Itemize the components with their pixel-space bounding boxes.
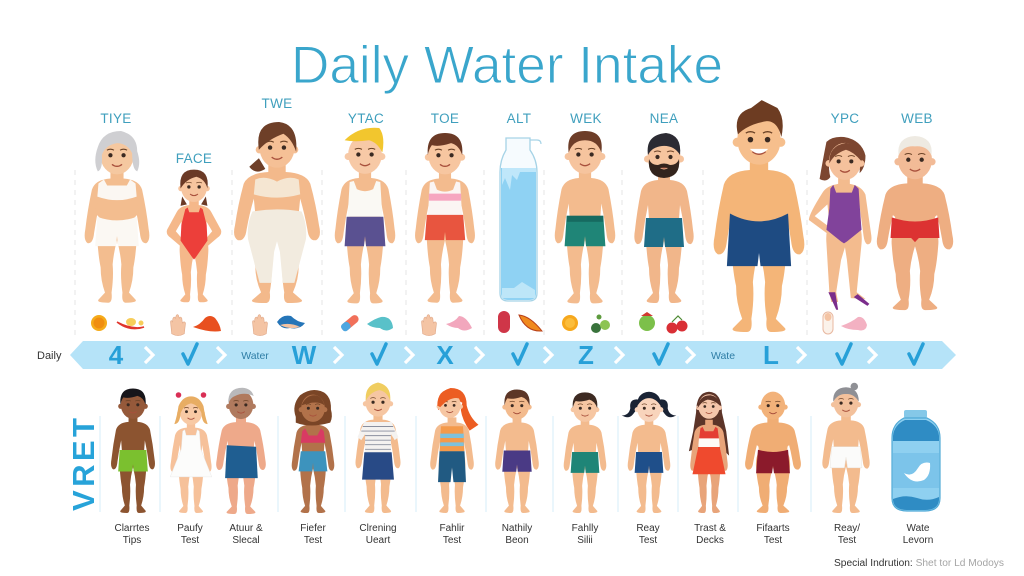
band symbols and words: 4 (109, 340, 124, 370)
band symbols and words: W (292, 340, 317, 370)
top column labels: NEA (650, 111, 678, 126)
top column labels: WEB (901, 111, 933, 126)
top column labels (100, 96, 933, 166)
bottom captions: Ueart (366, 535, 390, 546)
band symbols and words: Z (578, 340, 594, 370)
top column labels: ALT (507, 111, 531, 126)
figure: TOE short-haired girl (415, 133, 475, 303)
top column labels: TOE (431, 111, 459, 126)
band symbols and words: Wate (711, 350, 735, 362)
title: Daily Water Intake (291, 36, 723, 95)
figure: girl with pigtails (622, 392, 676, 513)
figure: WEK boy in teal shorts (555, 131, 615, 303)
figure: tall water bottle (500, 138, 541, 301)
bottom captions: Clarrtes (114, 523, 150, 534)
band symbols and words: X (436, 340, 454, 370)
figure: blonde girl in white dress (170, 392, 212, 513)
figure: grey-haired woman with white shorts (822, 383, 870, 513)
daily label: Daily (37, 350, 62, 362)
bottom captions: Fahlir (439, 523, 465, 534)
figure: boy with teal shorts (564, 392, 606, 513)
figure: FACE girl in red swimsuit (167, 170, 221, 302)
bottom captions: Fiefer (300, 523, 326, 534)
figure: boy with purple shorts (495, 389, 539, 513)
arrow band (70, 341, 956, 369)
figure: bald man with maroon shorts (745, 392, 801, 513)
footnote: Special Indrution: Shet tor Ld Modoys (834, 558, 1004, 569)
bottom captions: Trast & (694, 523, 726, 534)
vertical heading: VRET (66, 418, 101, 511)
band symbols and words (109, 340, 923, 370)
bottom captions: Reay/ (834, 523, 860, 534)
figure: curly-haired woman in pink top (292, 390, 334, 513)
bottom captions: Test (181, 535, 199, 546)
bottom captions: Test (304, 535, 322, 546)
bottom captions (114, 523, 933, 546)
band chevrons (145, 347, 876, 363)
figure: older man with blue shorts (216, 388, 266, 514)
figure: red-haired girl in striped top (430, 388, 478, 513)
top column labels: YTAC (348, 111, 384, 126)
bottom captions: Decks (696, 535, 724, 546)
bottom captions: Fifaarts (756, 523, 790, 534)
bottom captions: Wate (907, 523, 930, 534)
bottom captions: Nathily (502, 523, 532, 534)
band symbols and words: Water (241, 350, 269, 362)
bottom captions: Test (639, 535, 657, 546)
bottom captions: Beon (505, 535, 529, 546)
figure: YTAC blond boy (335, 128, 395, 303)
bottom captions: Fahlly (572, 523, 598, 534)
bottom captions: Tips (123, 535, 141, 546)
figure: blond boy in striped shirt (355, 382, 401, 513)
figure: large water bottle (892, 410, 940, 511)
bottom captions: Atuur & (229, 523, 263, 534)
top column labels: TIYE (100, 111, 132, 126)
bottom captions: Reay (636, 523, 660, 534)
bottom captions: Test (764, 535, 782, 546)
top column labels: WEK (570, 111, 602, 126)
top column labels: FACE (176, 151, 212, 166)
figure: long-haired girl in red dress (689, 392, 729, 513)
figure: NEA bearded man (634, 133, 694, 303)
figure: WEB older man in red briefs (877, 136, 953, 310)
figure: boy with green shorts (111, 388, 155, 513)
bottom captions: Levorn (903, 535, 933, 546)
figure: YPC woman in purple swimsuit (809, 137, 871, 310)
food icons row (91, 311, 867, 336)
bottom captions: Clrening (359, 523, 397, 534)
bottom captions: Test (838, 535, 856, 546)
top column labels: TWE (262, 96, 292, 111)
bottom captions: Paufy (177, 523, 203, 534)
figure: TIYE grey-haired woman (85, 131, 149, 303)
band symbols and words: L (763, 340, 779, 370)
figure: large man in navy shorts (714, 100, 804, 332)
figure: TWE woman in cream leggings (234, 122, 320, 303)
bottom captions: Test (443, 535, 461, 546)
top column labels: YPC (831, 111, 859, 126)
bottom captions: Slecal (232, 535, 260, 546)
bottom captions: Silii (577, 535, 593, 546)
